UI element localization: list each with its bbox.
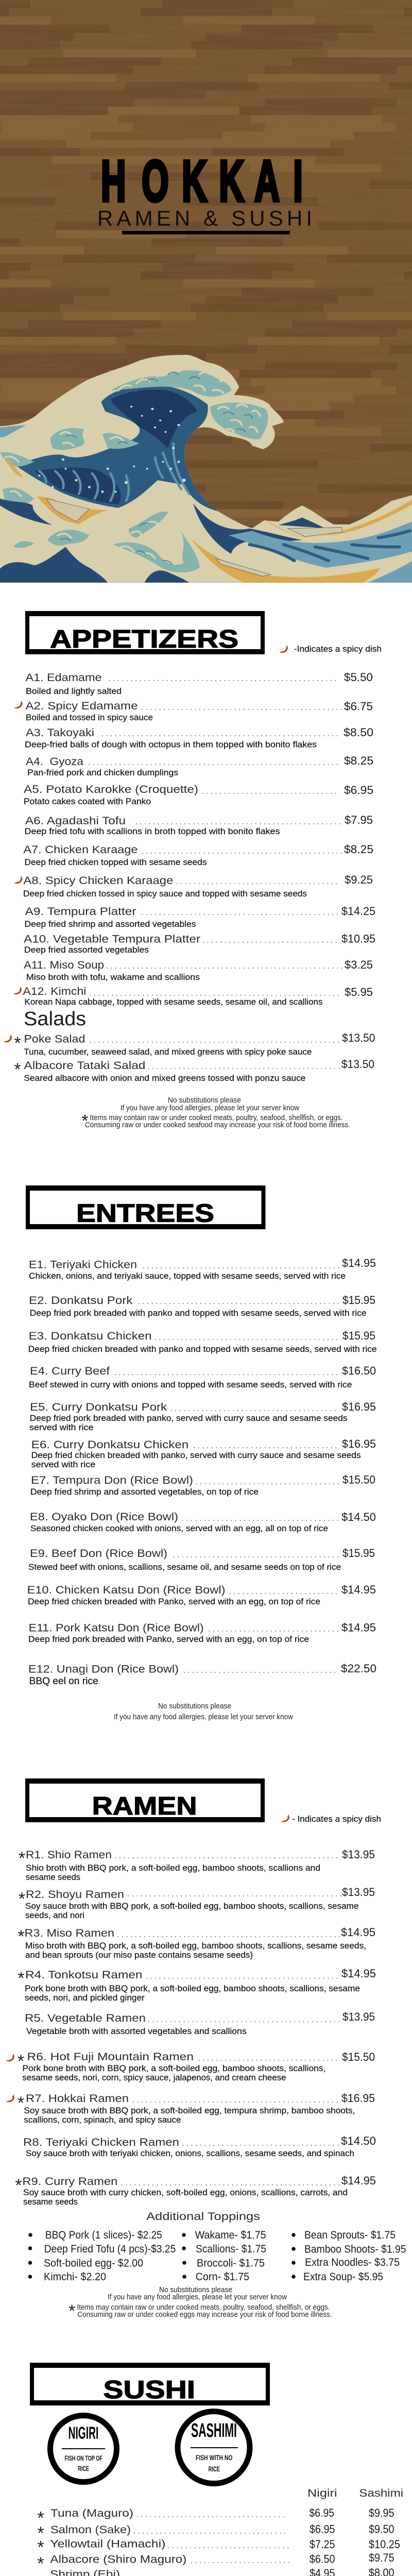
item: A4: Pan-fried pork and chicken dumplings bbox=[27, 768, 178, 777]
footnote: ramen: If you have any food allergies, please let your server know bbox=[108, 2293, 287, 2301]
row: shrimp bbox=[50, 2566, 394, 2576]
panel: appetizers list bbox=[4, 671, 375, 1083]
item: R1: * bbox=[19, 1849, 25, 1868]
item: E7 bbox=[30, 1473, 375, 1497]
item: R8: Soy sauce broth with teriyaki chicken, onions, scallions, sesame seeds, and spinach bbox=[26, 2148, 354, 2158]
item: R3: and bean sprouts (our miso paste contains sesame seeds) bbox=[25, 1950, 253, 1960]
item: A11: A11. Miso Soup bbox=[24, 959, 104, 971]
item: A12: $5.95 bbox=[345, 986, 373, 998]
item: A6: A6. Agadashi Tofu bbox=[25, 815, 126, 827]
item: R2: $13.95 bbox=[342, 1886, 375, 1899]
item: E3: Deep fried chicken breaded with panko and topped with sesame seeds, served with rice bbox=[28, 1344, 377, 1354]
footnote: ramen bbox=[68, 2286, 332, 2321]
item: E11 bbox=[28, 1621, 376, 1644]
row: yellowtail: $7.25 bbox=[310, 2538, 335, 2551]
footnote: appetizers: Consuming raw or under cooked seafood may increase your risk of food borne illness. bbox=[85, 1121, 350, 1129]
row: tuna: $6.95 bbox=[309, 2506, 334, 2519]
toppings list bbox=[44, 2229, 406, 2283]
item: E5: Deep fried pork breaded with panko, served with curry sauce and sesame seeds bbox=[30, 1413, 348, 1423]
item: R4: $14.95 bbox=[341, 1967, 376, 1980]
item: E5: served with rice bbox=[29, 1422, 94, 1432]
item: R1 bbox=[19, 1848, 375, 1882]
item: E6: $16.95 bbox=[342, 1437, 376, 1450]
item: A10: Deep fried assorted vegetables bbox=[24, 945, 149, 955]
item: E4: $16.50 bbox=[342, 1364, 376, 1377]
item: R4: * bbox=[18, 1969, 25, 1988]
item: Albacore Tataki Salad bbox=[14, 1058, 374, 1083]
item: E1: $14.95 bbox=[342, 1257, 376, 1269]
item: E12: $22.50 bbox=[341, 1662, 376, 1675]
item: E9 bbox=[28, 1547, 375, 1572]
toppings list: Wakame- $1.75 bbox=[195, 2229, 266, 2241]
item: A8 bbox=[14, 873, 373, 899]
item: E10: E10. Chicken Katsu Don (Rice Bowl) bbox=[27, 1584, 225, 1596]
toppings list: Extra Noodles- $3.75 bbox=[305, 2257, 400, 2268]
item: R9: Soy sauce broth with curry chicken, soft-boiled egg, onions, scallions, carrots, and bbox=[23, 2188, 348, 2197]
item: A2 bbox=[14, 700, 373, 722]
item: E6 bbox=[31, 1437, 376, 1469]
item: E11: $14.95 bbox=[341, 1621, 376, 1634]
item: R7 bbox=[6, 2092, 375, 2125]
item: R6: R6. Hot Fuji Mountain Ramen bbox=[27, 2051, 194, 2063]
item: R1: $13.95 bbox=[342, 1848, 375, 1861]
item: A10: $10.95 bbox=[341, 933, 375, 945]
panel: nigiri and sashimi price table bbox=[37, 2487, 403, 2576]
heading: SUSHI bbox=[30, 2363, 270, 2405]
column headers: Nigiri bbox=[307, 2487, 337, 2499]
title: HOKKAI logo: RAMEN & SUSHI bbox=[97, 206, 312, 230]
row: yellowtail bbox=[37, 2538, 400, 2557]
item: E8: Seasoned chicken cooked with onions, served with an egg, all on top of rice bbox=[30, 1523, 328, 1533]
item: R7: $16.95 bbox=[341, 2092, 375, 2105]
row: salmon: $6.95 bbox=[310, 2522, 335, 2536]
item: E3: E3. Donkatsu Chicken bbox=[29, 1330, 152, 1342]
item: A3: $8.50 bbox=[344, 726, 373, 739]
row: tuna: * bbox=[37, 2508, 44, 2528]
item: E6: E6. Curry Donkatsu Chicken bbox=[31, 1439, 188, 1451]
item: R5: Vegetable broth with assorted vegetables and scallions bbox=[26, 2026, 247, 2036]
heading: RAMEN: RAMEN bbox=[92, 1792, 197, 1820]
item: A5 bbox=[24, 784, 373, 806]
item: A2: Boiled and tossed in spicy sauce bbox=[26, 713, 153, 722]
note: spicy legend for appetizers: -Indicates a spicy dish bbox=[294, 644, 382, 654]
item: A3: A3. Takoyaki bbox=[26, 727, 94, 739]
badge: nigiri: RICE bbox=[78, 2464, 89, 2472]
footnote: ramen: No substitutions please bbox=[159, 2286, 232, 2294]
item: E5: $16.95 bbox=[342, 1400, 376, 1413]
item: R1: Shio broth with BBQ pork, a soft-boiled egg, bamboo shoots, scallions and bbox=[26, 1863, 320, 1873]
item: R7: Soy sauce broth with BBQ pork, a soft-boiled egg, tempura shrimp, bamboo shoots, bbox=[24, 2106, 355, 2115]
item: R9 bbox=[15, 2174, 376, 2207]
item: E5: E5. Curry Donkatsu Pork bbox=[30, 1401, 167, 1413]
column headers: Sashimi bbox=[359, 2487, 403, 2499]
toppings list: Kimchi- $2.20 bbox=[44, 2271, 106, 2283]
item: R9: R9. Curry Ramen bbox=[22, 2176, 117, 2188]
title: HOKKAI logo: HOKKAI bbox=[101, 148, 303, 213]
footnote: entrees bbox=[114, 1702, 293, 1721]
row: yellowtail: Yellowtail (Hamachi) bbox=[50, 2538, 165, 2550]
item: A5: Potato cakes coated with Panko bbox=[24, 796, 151, 806]
item: E10: Deep fried chicken breaded with Panko, served with an egg, on top of rice bbox=[28, 1597, 320, 1606]
item: R6: * bbox=[18, 2052, 24, 2071]
item: A1: A1. Edamame bbox=[26, 672, 102, 684]
item: A5: $6.95 bbox=[344, 784, 373, 796]
item: Albacore Tataki Salad: Albacore Tataki Salad bbox=[24, 1060, 145, 1072]
item: A7: A7. Chicken Karaage bbox=[23, 844, 138, 856]
item: A9 bbox=[25, 905, 375, 929]
item: A6: $7.95 bbox=[345, 814, 373, 826]
item: R8 bbox=[23, 2134, 376, 2158]
item: A10 bbox=[24, 933, 375, 955]
item: A9: Deep fried shrimp and assorted vegetables bbox=[25, 919, 196, 929]
item: A12 bbox=[13, 986, 373, 1007]
item: A11 bbox=[24, 958, 373, 982]
item: A9: $14.25 bbox=[341, 905, 375, 918]
item: A9: A9. Tempura Platter bbox=[25, 906, 136, 918]
badge: sashimi: RICE bbox=[209, 2465, 220, 2473]
item: E3: $15.95 bbox=[342, 1329, 375, 1342]
item: A1: Boiled and lightly salted bbox=[26, 686, 122, 696]
item: A4 bbox=[26, 754, 373, 777]
toppings list: Bamboo Shoots- $1.95 bbox=[304, 2243, 406, 2256]
item: Albacore Tataki Salad: * bbox=[14, 1060, 21, 1079]
item: R6: $15.50 bbox=[342, 2050, 375, 2063]
item: A3: Deep-fried balls of dough with octopus in them topped with bonito flakes bbox=[25, 739, 317, 749]
item: Poke Salad: Poke Salad bbox=[24, 1033, 85, 1045]
item: R3: Miso broth with BBQ pork, a soft-boiled egg, bamboo shoots, scallions, sesame seeds, bbox=[25, 1941, 366, 1951]
item: R7: scallions, corn, spinach, and spicy sauce bbox=[24, 2115, 181, 2125]
item: E11: Deep fried pork breaded with Panko, served with an egg, on top of rice bbox=[28, 1634, 309, 1644]
item: R2: Soy sauce broth with BBQ pork, a soft-boiled egg, bamboo shoots, scallions, sesame bbox=[25, 1901, 358, 1911]
item: R2 bbox=[19, 1886, 375, 1920]
item: E1: E1. Teriyaki Chicken bbox=[29, 1259, 137, 1271]
toppings list: Bean Sprouts- $1.75 bbox=[304, 2229, 396, 2241]
subheading: Salads: Salads bbox=[24, 1008, 86, 1030]
item: R8: $14.50 bbox=[341, 2134, 376, 2147]
column headers bbox=[307, 2487, 403, 2499]
item: A11: Miso broth with tofu, wakame and scallions bbox=[26, 972, 200, 982]
badge: sashimi: SASHIMI bbox=[191, 2420, 237, 2442]
toppings list: Broccoli- $1.75 bbox=[197, 2258, 265, 2269]
badge: sashimi: FISH WITH NO bbox=[196, 2453, 233, 2462]
item: E3 bbox=[28, 1329, 377, 1354]
row: salmon: Salmon (Sake) bbox=[50, 2524, 131, 2536]
row: tuna: Tuna (Maguro) bbox=[50, 2507, 133, 2519]
footnote: appetizers: If you have any food allergies, please let your server know bbox=[121, 1104, 300, 1112]
item: R4: seeds, nori, and pickled ginger bbox=[25, 1993, 145, 2003]
item: R3: R3. Miso Ramen bbox=[25, 1927, 114, 1939]
item: E9: E9. Beef Don (Rice Bowl) bbox=[30, 1548, 167, 1560]
footnote: appetizers bbox=[81, 1096, 350, 1131]
item: E12: BBQ eel on rice bbox=[29, 1676, 98, 1687]
item: R1: R1. Shio Ramen bbox=[26, 1849, 112, 1861]
toppings list: Scallions- $1.75 bbox=[196, 2243, 266, 2255]
item: E7: E7. Tempura Don (Rice Bowl) bbox=[31, 1475, 193, 1486]
heading: APPETIZERS bbox=[25, 611, 265, 654]
row: yellowtail: $10.25 bbox=[369, 2538, 400, 2551]
footnote: entrees: No substitutions please bbox=[158, 1702, 231, 1710]
footnote: ramen: Items may contain raw or under cooked meats, poultry, seafood, shellfish, or eggs. bbox=[77, 2303, 330, 2312]
item: A10: A10. Vegetable Tempura Platter bbox=[24, 934, 200, 945]
item: A1: $5.50 bbox=[344, 671, 373, 684]
panel: ramen list bbox=[6, 1848, 376, 2207]
badge: nigiri: NIGIRI bbox=[68, 2424, 98, 2442]
footnote: appetizers: * bbox=[81, 1111, 89, 1131]
item: R9: $14.95 bbox=[341, 2174, 376, 2187]
item: E4: Beef stewed in curry with onions and topped with sesame seeds, served with rice bbox=[29, 1380, 352, 1389]
row: albacore bbox=[37, 2551, 394, 2573]
item: R5: $13.95 bbox=[342, 2010, 375, 2023]
footnote: entrees: If you have any food allergies, please let your server know bbox=[114, 1713, 293, 1721]
toppings list: Extra Soup- $5.95 bbox=[303, 2271, 383, 2283]
item: E4 bbox=[29, 1364, 376, 1389]
heading: RAMEN bbox=[25, 1778, 265, 1822]
heading: ENTREES: ENTREES bbox=[76, 1199, 214, 1227]
item: Poke Salad bbox=[4, 1031, 375, 1057]
heading: ENTREES bbox=[26, 1185, 266, 1229]
item: R1: sesame seeds bbox=[26, 1872, 80, 1882]
item: A1 bbox=[26, 671, 373, 696]
item: Poke Salad: Tuna, cucumber, seaweed salad, and mixed greens with spicy poke sauce bbox=[24, 1047, 312, 1057]
item: E10 bbox=[27, 1583, 376, 1606]
item: R6: sesame seeds, nori, corn, spicy sauce, jalapenos, and cream cheese bbox=[22, 2073, 286, 2082]
item: R3: $14.95 bbox=[341, 1926, 375, 1939]
item: E5 bbox=[29, 1400, 376, 1432]
heading: APPETIZERS: APPETIZERS bbox=[50, 625, 238, 653]
toppings list: Soft-boiled egg- $2.00 bbox=[44, 2258, 143, 2269]
item: E12 bbox=[28, 1662, 376, 1687]
item: R8: R8. Teriyaki Chicken Ramen bbox=[23, 2137, 179, 2148]
item: E8: E8. Oyako Don (Rice Bowl) bbox=[30, 1511, 178, 1523]
item: A7: $8.25 bbox=[344, 843, 373, 856]
illustration: the great wave bbox=[0, 355, 412, 583]
footnote: appetizers: No substitutions please bbox=[168, 1096, 241, 1105]
row: tuna: $9.95 bbox=[369, 2506, 394, 2519]
item: E1: Chicken, onions, and teriyaki sauce, topped with sesame seeds, served with rice bbox=[29, 1271, 346, 1281]
item: A3 bbox=[25, 726, 373, 749]
item: A5: A5. Potato Karokke (Croquette) bbox=[24, 784, 198, 795]
item: A6 bbox=[25, 814, 373, 836]
item: R4 bbox=[18, 1967, 376, 2003]
item: Albacore Tataki Salad: $13.50 bbox=[341, 1058, 374, 1071]
item: R9: * bbox=[15, 2176, 22, 2195]
note: spicy legend for ramen: - Indicates a spicy dish bbox=[292, 1814, 381, 1824]
item: R6 bbox=[6, 2050, 375, 2082]
toppings list: BBQ Pork (1 slices)- $2.25 bbox=[45, 2229, 162, 2241]
toppings list: Corn- $1.75 bbox=[196, 2271, 249, 2283]
item: R3 bbox=[18, 1926, 375, 1960]
item: R2: R2. Shoyu Ramen bbox=[26, 1889, 124, 1901]
item: R6: Pork bone broth with BBQ pork, a soft-boiled egg, bamboo shoots, scallions, bbox=[22, 2063, 325, 2073]
row: albacore: * bbox=[37, 2554, 44, 2573]
panel: additional toppings bbox=[28, 2211, 406, 2283]
item: E8: $14.50 bbox=[341, 1511, 376, 1523]
row: albacore: Albacore (Shiro Maguro) bbox=[50, 2553, 186, 2566]
item: E9: Stewed beef with onions, scallions, sesame oil, and sesame seeds on top of rice bbox=[28, 1562, 341, 1572]
item: E2 bbox=[29, 1294, 375, 1318]
toppings list: Deep Fried Tofu (4 pcs)-$3.25 bbox=[44, 2243, 176, 2255]
item: Albacore Tataki Salad: Seared albacore with onion and mixed greens tossed with ponzu sauce bbox=[24, 1073, 305, 1083]
heading: SUSHI: SUSHI bbox=[103, 2376, 195, 2404]
item: A12: A12. Kimchi bbox=[23, 986, 86, 997]
item: E2: E2. Donkatsu Pork bbox=[29, 1295, 133, 1307]
item: A8: Deep fried chicken tossed in spicy sauce and topped with sesame seeds bbox=[23, 889, 307, 899]
row: albacore: $6.50 bbox=[310, 2552, 335, 2566]
item: A2: $6.75 bbox=[344, 700, 373, 713]
item: A7: Deep fried chicken topped with sesame seeds bbox=[25, 857, 207, 867]
badge: sashimi bbox=[178, 2411, 250, 2483]
row: tuna bbox=[37, 2506, 394, 2528]
item: R2: * bbox=[19, 1889, 25, 1909]
footnote: appetizers: Items may contain raw or under cooked meats, poultry, seafood, shellfish, or eggs. bbox=[90, 1114, 343, 1122]
item: R5: R5. Vegetable Ramen bbox=[25, 2012, 146, 2024]
row: salmon bbox=[37, 2522, 394, 2543]
item: R4: R4. Tonkotsu Ramen bbox=[25, 1969, 142, 1981]
item: A6: Deep fried tofu with scallions in broth topped with bonito flakes bbox=[25, 826, 280, 836]
bullet dots bbox=[28, 2233, 296, 2279]
panel: entrees list bbox=[27, 1257, 377, 1687]
item: R9: sesame seeds bbox=[23, 2197, 78, 2207]
item: A7 bbox=[23, 843, 373, 867]
item: A4: A4. Gyoza bbox=[26, 756, 83, 768]
item: E7: Deep fried shrimp and assorted vegetables, on top of rice bbox=[30, 1487, 259, 1497]
item: Poke Salad: * bbox=[14, 1033, 21, 1053]
item: A2: A2. Spicy Edamame bbox=[26, 700, 138, 712]
item: E9: $15.95 bbox=[342, 1547, 375, 1560]
badge: nigiri: FISH ON TOP OF bbox=[65, 2454, 102, 2462]
item: E2: Deep fried pork breaded with panko and topped with sesame seeds, served with rice bbox=[30, 1308, 367, 1318]
item: E4: E4. Curry Beef bbox=[30, 1365, 110, 1377]
item: E2: $15.95 bbox=[342, 1294, 375, 1307]
item: R7: R7. Hokkai Ramen bbox=[26, 2093, 129, 2105]
subheading: additional toppings: Additional Toppings bbox=[146, 2211, 260, 2223]
row: salmon: $9.50 bbox=[369, 2522, 394, 2536]
item: E6: Deep fried chicken breaded with panko, served with curry sauce and sesame seeds bbox=[31, 1450, 361, 1460]
footnote: ramen: * bbox=[68, 2301, 75, 2321]
item: E6: served with rice bbox=[31, 1460, 95, 1469]
item: R2: seeds, and nori bbox=[25, 1910, 84, 1920]
item: A8: $9.25 bbox=[345, 873, 373, 886]
item: R4: Pork bone broth with BBQ pork, a soft-boiled egg, bamboo shoots, scallions, sesame bbox=[25, 1984, 360, 1993]
wood background panel bbox=[0, 0, 412, 583]
row: yellowtail: * bbox=[37, 2538, 44, 2557]
item: E7: $15.50 bbox=[342, 1473, 375, 1486]
item: E10: $14.95 bbox=[341, 1583, 376, 1596]
row: albacore: $9.75 bbox=[369, 2551, 394, 2564]
item: A8: A8. Spicy Chicken Karaage bbox=[23, 875, 173, 887]
item: R3: * bbox=[18, 1927, 25, 1946]
item: E12: E12. Unagi Don (Rice Bowl) bbox=[28, 1663, 179, 1675]
item: E1 bbox=[29, 1257, 376, 1281]
row: salmon: * bbox=[37, 2523, 44, 2543]
badge: nigiri bbox=[50, 2415, 116, 2482]
footnote: ramen: Consuming raw or under cooked eggs may increase your risk of food borne illness. bbox=[77, 2311, 332, 2319]
item: A12: Korean Napa cabbage, topped with sesame seeds, sesame oil, and scallions bbox=[25, 997, 322, 1007]
item: E8 bbox=[30, 1511, 376, 1533]
item: Poke Salad: $13.50 bbox=[342, 1031, 375, 1044]
item: A11: $3.25 bbox=[345, 958, 373, 971]
item: A4: $8.25 bbox=[344, 754, 373, 767]
item: R7: * bbox=[18, 2093, 24, 2113]
item: R5 bbox=[25, 2010, 375, 2036]
item: E11: E11. Pork Katsu Don (Rice Bowl) bbox=[29, 1622, 204, 1634]
